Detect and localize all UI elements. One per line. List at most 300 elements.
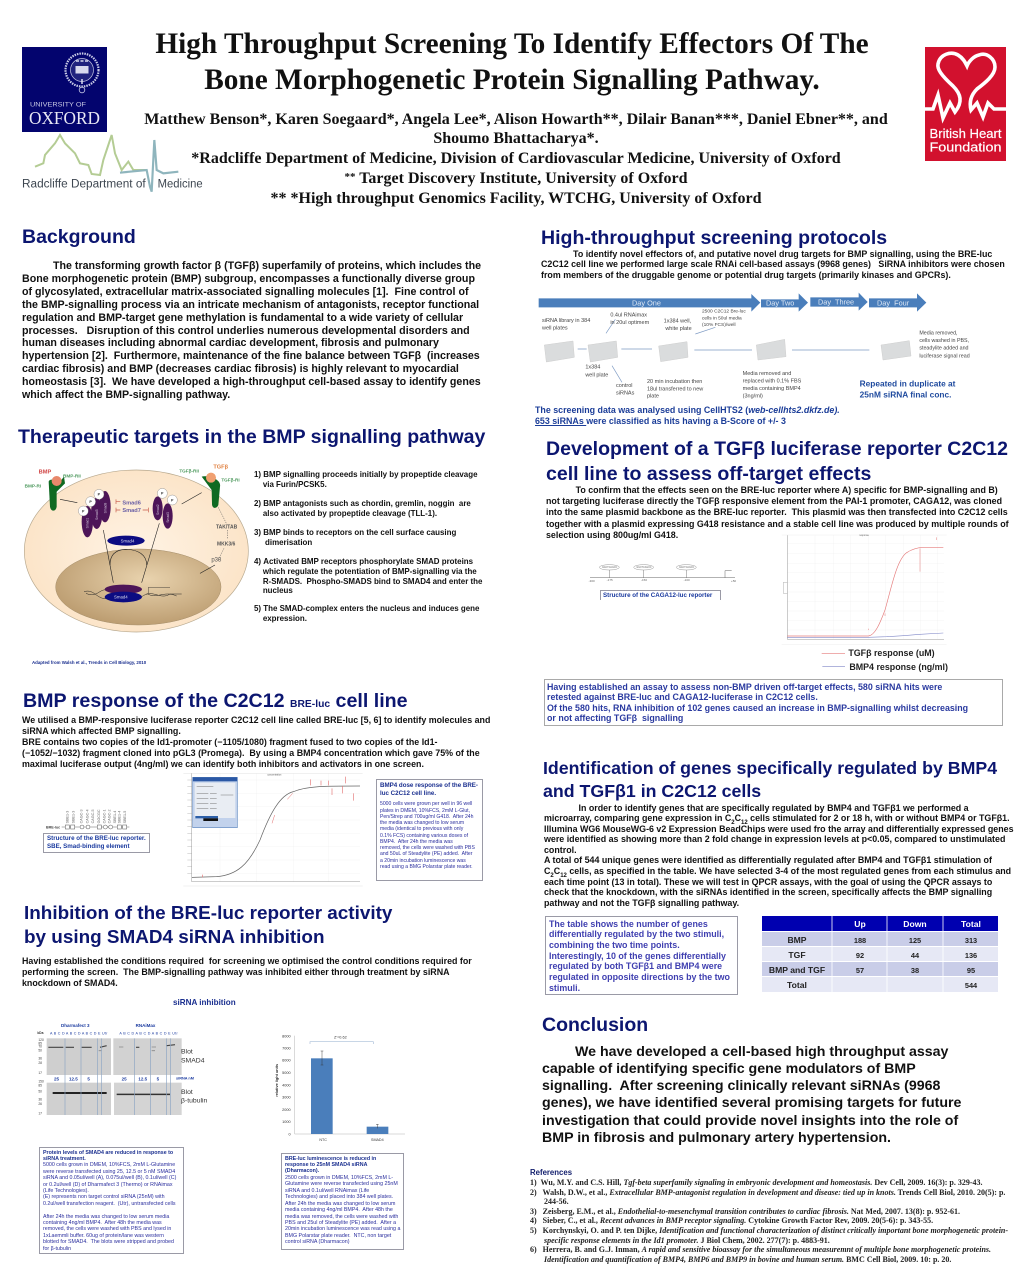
table: differentially regulated genes: TGF xyxy=(788,950,806,960)
labels: Media removed, xyxy=(919,331,958,337)
labels: plate xyxy=(647,394,659,400)
table: differentially regulated genes: Total xyxy=(961,919,981,929)
text: references: 2) Walsh, D.W., et al., Extracellular BMP-antagonist regulation in development and disease: tied up in knots. Trends Cell Biol, 2010. 20(5): p. xyxy=(530,1188,1005,1197)
caption box: protein levels: After 24h the media was changed to low serum media xyxy=(43,1214,169,1220)
diagram: CAGA12 reporter structure: GGCTCAGCC xyxy=(602,566,617,569)
callout: table explanation: combining the two time points. xyxy=(549,940,680,950)
figure: western blots: 5 xyxy=(157,1076,160,1081)
text: pathway steps: which regulate the potentiation of BMP-signalling via the xyxy=(263,567,477,576)
table: differentially regulated genes: Down xyxy=(903,919,927,929)
text: TGFb reporter xyxy=(546,485,1009,540)
figure: western blots: 12.5 xyxy=(69,1076,78,1081)
caption box: BMP4 dose response: 5000 cells were grown per well in 96 well xyxy=(380,801,472,807)
diagram: CAGA12 reporter structure: +50 xyxy=(731,579,736,583)
chart: relative light units bar chart: 6000 xyxy=(282,1059,291,1063)
caption box: CAGA12-luc: Structure of the CAGA12-luc reporter xyxy=(603,592,712,599)
table: differentially regulated genes: BMP xyxy=(787,935,807,945)
diagram: BRE-luc reporter structure: CAGC-5 xyxy=(91,810,95,823)
text: background: regulation and BMP-target gene methylation is fundamental to a wide variety of cellular xyxy=(22,312,463,324)
callout: table explanation: Interestingly, 10 of the genes differentially xyxy=(549,951,726,961)
table: differentially regulated genes xyxy=(762,916,998,992)
logo: University of Oxford: UNIVERSITY OF xyxy=(30,102,86,108)
chart: relative light units bar chart: 4000 xyxy=(282,1083,291,1087)
diagram: BMP signalling pathway: BMP xyxy=(39,469,51,475)
text: BMP response: We utilised a BMP-responsive luciferase reporter C2C12 cell line called BRE-luc [5, 6] to identify molecules and xyxy=(22,714,490,724)
diagram: BRE-luc reporter structure xyxy=(46,809,130,830)
caption box: BMP4 dose response: luc C2C12 cell line. xyxy=(380,790,436,797)
text: background xyxy=(22,260,481,401)
text: background: the BMP-signalling process via an intricate mechanism of antagonists, receptor functional xyxy=(22,299,479,311)
text: BMP response xyxy=(22,714,490,769)
labels: media containing BMP4 xyxy=(743,386,801,392)
table: differentially regulated genes: 136 xyxy=(965,951,977,960)
chart: relative light units bar chart: 2000 xyxy=(282,1108,291,1112)
text: background: cardiac fibrosis) and BMP (decreases cardiac fibrosis) is highly relevant to myocardial xyxy=(22,363,459,375)
callout: off-target effects: retested against BRE-luc and CAGA12-luciferase in C2C12 cells. xyxy=(547,692,818,702)
text: gene identification: In order to identify genes that are specifically regulated by BMP4 and TGFβ1 we performed a xyxy=(579,802,969,812)
chart: relative light units bar chart: NTC xyxy=(319,1138,327,1142)
caption box: BMP4 dose response: a 20min incubation luminescence was xyxy=(380,858,466,864)
diagram: BRE-luc reporter structure: SBE1-3 xyxy=(66,811,70,823)
chart: relative light units bar chart: SMAD4 xyxy=(371,1138,384,1142)
diagram: screening timeline xyxy=(538,292,970,400)
text: pathway steps: 1) BMP signalling proceeds initially by propeptide cleavage xyxy=(254,470,478,479)
text: references: specific response elements in the Id1 promoter. J Biol Chem, 2002. 277(7): p. 4883-91. xyxy=(544,1236,830,1245)
arrow: Day Two xyxy=(761,293,808,312)
heading: Inhibition of BRE-luc: by using SMAD4 siRNA inhibition xyxy=(24,927,324,948)
diagram: BRE-luc reporter structure: CAGC-4 xyxy=(86,810,90,823)
heading: Inhibition of BRE-luc: Inhibition of the BRE-luc reporter activity xyxy=(24,903,392,924)
labels xyxy=(541,309,970,400)
heading: Inhibition of BRE-luc xyxy=(24,903,392,948)
text: TGFb reporter: selection using 800ug/ml G418. xyxy=(546,530,678,540)
table: differentially regulated genes: 57 xyxy=(856,966,864,975)
diagram: CAGA12 reporter structure: -175 xyxy=(607,578,613,582)
labels: siRNAs xyxy=(616,391,635,397)
caption box: BRE-luc reporter: SBE, Smad-binding element xyxy=(47,843,130,850)
text: pathway steps: 2) BMP antagonists such as chordin, gremlin, noggin are xyxy=(254,499,471,508)
caption box: BMP4 dose response: and 50uL of Steadylite (PE) added. After xyxy=(380,851,472,857)
caption box: protein levels: 1xLaemmli buffer. 60ug of protein/lane was western xyxy=(43,1233,164,1239)
text: background: human diseases including abnormal cardiac development, fibrosis and pulmonary xyxy=(22,337,439,349)
text: references: 5) Korchynskyi, O. and P. ten Dijke, Identification and functional characterization of distinct critically important bone morphogenetic protein- xyxy=(530,1226,1008,1235)
arrow: Day Three: Day Three xyxy=(818,298,854,307)
table: differentially regulated genes: Total xyxy=(787,980,807,990)
caption box: protein levels: or 0.2ul/well (D) of Dharmafect 3 (Thermo) or RNAimax xyxy=(43,1182,173,1188)
callout: off-target effects: Of the 580 hits, RNA inhibition of 102 genes caused an increase in BMP-signalling whilst decreasing xyxy=(547,703,968,713)
text: gene identification xyxy=(544,802,1014,908)
chart: relative light units bar chart: 7000 xyxy=(282,1046,291,1050)
text: references: 4) Sieber, C., et al., Recent advances in BMP receptor signaling. Cytokine Growth Factor Rev, 2009. 20(5-6): p. 343-55. xyxy=(530,1216,933,1225)
callout: off-target effects xyxy=(544,679,1003,726)
diagram: BMP signalling pathway: P xyxy=(89,500,92,504)
text: gene identification: control. xyxy=(544,845,577,855)
title xyxy=(155,28,869,96)
caption box: luminescence: siRNA and 0.1ul/well RNAimax (Life xyxy=(285,1188,369,1194)
text: pathway steps: 5) The SMAD-complex enters the nucleus and induces gene xyxy=(254,604,479,613)
text: pathway steps: nucleus xyxy=(263,586,293,595)
labels: 2500 C2C12 Bre-luc xyxy=(702,309,746,315)
text: TGFb reporter: into the same plasmid backbone as the BRE-luc reporter. This plasmid was then transfected into C2C12 cells xyxy=(546,507,1008,517)
text: TGFb reporter: together with a plasmid expressing G418 resistance and a stable cell line was produced by multiple rounds of xyxy=(546,519,1009,529)
caption box: protein levels: containing 4ng/ml BMP4. After 48h the media was xyxy=(43,1220,162,1226)
authors and affiliations: Shoumo Bhattacharya*. xyxy=(433,130,599,147)
title: High Throughput Screening To Identify Effectors Of The xyxy=(155,28,869,60)
text: gene identification: A total of 544 unique genes were identified as differentially regulated after BMP4 and TGFβ1 stimulation of xyxy=(544,855,992,865)
logo: University of Oxford xyxy=(22,47,107,132)
figure: western blots: SMAD4 xyxy=(181,1057,205,1064)
diagram: BRE-luc reporter structure: SBE1-4 xyxy=(118,811,122,823)
figure: western blots: 5 xyxy=(87,1076,90,1081)
heading: Identification of genes: Identification of genes specifically regulated by BMP4 xyxy=(543,758,997,778)
table: differentially regulated genes: 38 xyxy=(911,966,919,975)
diagram: BMP signalling pathway: P xyxy=(171,498,174,502)
authors and affiliations: Matthew Benson*, Karen Soegaard*, Angela Lee*, Alison Howarth**, Dilair Banan***, Daniel Ebner**, and xyxy=(144,111,888,128)
diagram: BRE-luc reporter structure: SBE1-3 xyxy=(72,811,76,823)
caption box: luminescence: response to 25nM SMAD4 siRNA xyxy=(285,1162,367,1168)
labels: cells in 50ul media xyxy=(702,316,742,322)
chart: TGFb and BMP4 response curves xyxy=(782,534,946,644)
text: gene identification: pathway and not the TGFβ signalling pathway. xyxy=(544,898,739,908)
diagram: BMP signalling pathway: P xyxy=(82,509,85,513)
text: inhibition: knockdown of SMAD4. xyxy=(22,978,118,988)
text: pathway steps: 3) BMP binds to receptors on the cell surface causing xyxy=(254,528,456,537)
caption box: BRE-luc reporter xyxy=(43,833,150,853)
diagram: BRE-luc reporter structure: SBE1-4 xyxy=(113,811,117,823)
caption box: BMP4 dose response: read using a BMG Polarstar plate reader. xyxy=(380,864,473,870)
text: conclusion: investigation that could provide novel insights into the role of xyxy=(542,1113,958,1129)
text: pathway steps: expression. xyxy=(263,614,307,623)
table: differentially regulated genes: Up xyxy=(854,919,866,929)
table: differentially regulated genes: BMP and TGF xyxy=(769,965,825,975)
labels: well plates xyxy=(541,325,568,331)
chart: relative light units bar chart: Z'=0.62 xyxy=(334,1036,347,1040)
heading: Identification of genes xyxy=(543,758,998,801)
diagram: BMP signalling pathway: TGFβ-RII xyxy=(179,469,199,474)
diagram: BMP signalling pathway: Smad5 xyxy=(95,509,99,520)
labels: replaced with 0.1% FBS xyxy=(743,378,802,384)
authors and affiliations: ** Target Discovery Institute, University of Oxford xyxy=(345,170,687,187)
diagram: BRE-luc reporter structure: CAGC-3 xyxy=(80,810,84,823)
diagram: BRE-luc reporter structure: SBE1-5 xyxy=(123,811,127,823)
text: BMP response: siRNA which affected BMP signalling. xyxy=(22,726,181,736)
legend: response curves xyxy=(822,648,948,672)
heading: BMP response: BMP response of the C2C12 BRE-luc cell line xyxy=(23,690,408,712)
diagram: BMP signalling pathway: P xyxy=(98,493,101,497)
caption box: protein levels: 5000 cells grown in DMEM, 10%FCS, 2mM L-Glutamine xyxy=(43,1162,175,1168)
heading: Background: Background xyxy=(22,226,136,248)
caption box: luminescence: (Dharmacon). xyxy=(285,1168,319,1174)
text: background: of glycosylated, extracellular matrix-associated signalling molecules [1]. Fine control of xyxy=(22,286,469,298)
text: conclusion: BMP in fibrosis and pulmonary artery hypertension. xyxy=(542,1130,891,1146)
text: gene identification: C2C12 cells, as specified in the table. We have selected 3-4 of the most regulated genes from each stimulus and xyxy=(544,866,1011,879)
labels: (10% FCS)/well xyxy=(702,322,736,328)
diagram: BMP signalling pathway: BMP-RI xyxy=(25,484,41,489)
caption box: luminescence: After 24h the media was changed to low serum xyxy=(285,1201,395,1207)
caption box: protein levels: Protein levels of SMAD4 are reduced in response to xyxy=(43,1150,173,1156)
labels: luciferase signal read xyxy=(919,353,970,359)
text: background: hypertension [2]. Furthermore, maintenance of the fine balance between TGFβ (increases xyxy=(22,350,480,362)
heading: references: References xyxy=(530,1168,572,1177)
figure: western blots: 36 xyxy=(38,1097,42,1101)
caption box: luminescence: media was removed, the cells were washed with xyxy=(285,1214,398,1220)
text: inhibition xyxy=(22,956,472,988)
caption box: BMP4 dose response: plates in DMEM, 10%FCS, 2mM L-Glut, xyxy=(380,808,470,814)
text: pathway steps: R-SMADS. Phospho-SMADS bind to SMAD4 and enter the xyxy=(263,577,482,586)
text: conclusion: capable of identifying specific gene modulators of BMP xyxy=(542,1061,916,1077)
text: gene identification: were identified as showing more than 2 fold change in expression levels at p<0.05, compared to unstimulated xyxy=(544,834,1005,844)
callout: table explanation: differentially regulated by the two stimuli, xyxy=(549,929,724,939)
text: pathway steps: dimerisation xyxy=(265,538,312,547)
diagram: BMP signalling pathway: P xyxy=(161,492,164,496)
caption box: luminescence: PBS and 25ul of Steadylite (PE) added. After a xyxy=(285,1220,396,1226)
text: references: 1) Wu, M.Y. and C.S. Hill, Tgf-beta superfamily signaling in embryonic development and homeostasis. Dev Cell, 2009. 16(3): p. 329-43. xyxy=(530,1178,983,1187)
figure: western blots: 50 xyxy=(38,1089,42,1093)
text: protocols xyxy=(541,248,1005,280)
labels: (3ng/ml) xyxy=(743,393,763,399)
figure: western blots: 70 xyxy=(38,1045,42,1049)
callout: table explanation xyxy=(545,916,738,995)
figure: western blots: kDa xyxy=(37,1031,44,1035)
figure: western blots: Blot xyxy=(181,1089,193,1096)
heading: High-throughput screening protocols: High-throughput screening protocols xyxy=(541,227,887,249)
labels: 18ul transferred to new xyxy=(647,386,703,392)
arrow: Day Four xyxy=(869,293,926,312)
caption box: luminescence: 2500 cells grown in DMEM, 10%FCS, 2mM L- xyxy=(285,1175,393,1181)
arrows between plates xyxy=(578,319,869,382)
figure: western blots: 50 xyxy=(38,1048,42,1052)
label: siRNA inhibition: siRNA inhibition xyxy=(173,998,236,1007)
text: background: processes. Disruption of this control underlies numerous developmental disorders and xyxy=(22,325,470,337)
figure: western blots: 17 xyxy=(38,1112,42,1116)
figure: western blots: 26 xyxy=(38,1102,42,1106)
diagram: BMP signalling pathway: BMP-RII xyxy=(63,473,81,478)
text: gene identification: microarray, comparing gene expression in C2C12 cells stimulated for 2 or 18 h, with or without BMP4 or TGFβ1. xyxy=(544,813,1010,826)
diagram: BMP signalling pathway: Smad8 xyxy=(103,503,107,513)
diagram: BMP signalling pathway: TGFβ-RI xyxy=(221,478,240,483)
caption box: luminescence xyxy=(281,1153,404,1250)
text: inhibition: performing the screen. The BMP-signalling pathway was inhibited either through treatment by siRNA xyxy=(22,966,450,976)
diagram: CAGA12 reporter structure: GGCTCAGCC xyxy=(679,566,694,569)
text: background: The transforming growth factor β (TGFβ) superfamily of proteins, which includes the xyxy=(53,260,481,272)
text: conclusion: genes), we have identified several promising targets for future xyxy=(542,1095,961,1111)
legend: response curves: TGFβ response (uM) xyxy=(848,648,935,658)
table: differentially regulated genes: 125 xyxy=(909,936,921,945)
chart: BMP4 dose response: concentration xyxy=(267,773,282,776)
text: screening analysis xyxy=(535,405,840,426)
figure: western blots: 85 xyxy=(38,1042,42,1046)
figure: western blots: Dharmafect 3 xyxy=(61,1023,90,1028)
logo: British Heart Foundation: British Heart xyxy=(930,126,1002,141)
diagram: BMP signalling pathway: Smad7 xyxy=(122,508,141,514)
figure: western blots: 36 xyxy=(38,1057,42,1061)
logo: Radcliffe Department of Medicine: Medicine xyxy=(158,176,203,190)
labels: 0.4ul RNAimax xyxy=(610,313,647,319)
caption box: luminescence: control siRNA (Dharmacon) xyxy=(285,1239,349,1245)
caption box: BMP4 dose response: the media was changed to low serum xyxy=(380,820,464,826)
labels: siRNA library in 384 xyxy=(542,318,590,324)
caption box: luminescence: media containing 4ng/ml BMP4. After 48h the xyxy=(285,1207,393,1213)
chart: relative light units bar chart: 5000 xyxy=(282,1071,291,1075)
caption box: BMP4 dose response: 0.1% FCS) containing various doses of xyxy=(380,833,468,839)
table: differentially regulated genes: 544 xyxy=(965,981,978,990)
plates xyxy=(544,339,911,362)
text: pathway steps: also activated by propeptide cleavage (TLL-1). xyxy=(263,509,437,518)
figure: western blots: siRNA nM xyxy=(176,1077,194,1081)
text: pathway steps: via Furin/PCSK5. xyxy=(263,480,327,489)
table: differentially regulated genes: 92 xyxy=(856,951,864,960)
heading: Conclusion: Conclusion xyxy=(542,1014,648,1036)
callout: table explanation: stimuli. xyxy=(549,983,580,993)
caption box: protein levels xyxy=(39,1147,184,1254)
logo: University of Oxford: OXFORD xyxy=(29,108,100,128)
text: background: homeostasis [3]. We have developed a high-throughput cell-based assay to identify genes xyxy=(22,376,481,388)
arrow: Day Four: Day Four xyxy=(877,299,910,308)
callout: table explanation: regulated in opposite directions by the two xyxy=(549,972,730,982)
text: screening analysis: The screening data was analysed using CellHTS2 (web-cellhts2.dkfz.de). xyxy=(535,405,840,415)
caption box: protein levels: 0.2ul/well transfection reagent. (Utr), untransfected cells xyxy=(43,1201,175,1207)
logo: Radcliffe Department of Medicine: Radcliffe Department of xyxy=(22,176,146,190)
figure: western blots: 120 xyxy=(38,1038,44,1042)
caption box: BMP4 dose response: Pen/Strep and 700ug/ml G418. After 24h xyxy=(380,814,473,820)
labels: Media removed and xyxy=(743,371,791,377)
diagram: BMP signalling pathway: Smad1 xyxy=(86,518,90,528)
caption box: BMP4 dose response: removed, the cells were washed with PBS xyxy=(380,845,475,851)
figure: western blots: 25 xyxy=(122,1076,127,1081)
text: gene identification: check that the knockdown, with the siRNAs identified in the screen, specifically affects the BMP signalling xyxy=(544,887,992,897)
heading: TGFb reporter development xyxy=(546,438,1008,484)
arrow: Day Two: Day Two xyxy=(766,299,794,308)
diagram: BMP signalling pathway: TAK/TAB xyxy=(216,525,238,531)
diagram: screening timeline: 25nM siRNA final conc. xyxy=(860,389,951,399)
figure: western blots: 25 xyxy=(54,1076,60,1081)
chart: TGFb and BMP4 response curves: response xyxy=(859,534,870,537)
labels: 20 min incubation then xyxy=(647,379,702,385)
caption box: luminescence: 20min incubation luminescence was read using a xyxy=(285,1226,400,1232)
caption box: protein levels: removed, the cells were washed with PBS and lysed in xyxy=(43,1226,171,1232)
figure: western blots: A B C D A B C D A B C D E Utr xyxy=(50,1031,108,1035)
diagram: BRE-luc reporter structure: CAGC-2 xyxy=(108,810,112,823)
chart: relative light units bar chart: 3000 xyxy=(282,1096,291,1100)
caption box: protein levels: siRNA treatment. xyxy=(43,1156,86,1162)
text: pathway steps xyxy=(254,470,482,623)
labels: 1x384 well, xyxy=(664,319,692,325)
diagram: BMP signalling pathway: TGFβ xyxy=(213,465,229,471)
diagram: CAGA12 reporter structure: -150 xyxy=(641,578,647,582)
authors and affiliations: ** *High throughput Genomics Facility, WTCHG, University of Oxford xyxy=(270,190,761,207)
callout: table explanation: regulated by both TGFβ1 and BMP4 were xyxy=(549,961,722,971)
caption box: BMP4 dose response: BMP4. After 24h the media was xyxy=(380,839,453,845)
caption box: CAGA12-luc xyxy=(600,590,721,600)
caption box: protein levels: siRNA and 0.05ul/well (A), 0.075ul/well (B), 0.1ul/well (C) xyxy=(43,1175,176,1181)
diagram: BMP signalling pathway: Smad2 xyxy=(156,504,160,515)
diagram: BRE-luc reporter structure: BRE-luc xyxy=(46,825,60,829)
callout: off-target effects: Having established an assay to assess non-BMP driven off-target effects, 580 siRNA hits were xyxy=(547,682,942,692)
caption box: luminescence: Glutamine were reverse transfected using 25nM xyxy=(285,1181,398,1187)
labels: cells washed in PBS, xyxy=(919,338,969,344)
chart: relative light units bar chart: 1000 xyxy=(282,1120,291,1124)
authors and affiliations xyxy=(144,111,888,207)
diagram: BRE-luc reporter structure: CAGC-1 xyxy=(102,810,106,823)
arrow: Day One: Day One xyxy=(632,299,661,308)
caption box: protein levels: were reverse transfected using 25, 12.5 or 5 nM SMAD4 xyxy=(43,1169,175,1175)
text: gene identification: Illumina WG6 MouseWG-6 v2 Expression BeadChips were used fro the array and differentially expressed genes xyxy=(544,824,1014,834)
labels: steadylite added and xyxy=(919,346,969,352)
caption box: protein levels: (E) represents non target control siRNA (25nM) with xyxy=(43,1194,165,1200)
caption box: protein levels: blotted for SMAD4. The blots were stripped and probed xyxy=(43,1239,174,1245)
table: differentially regulated genes: 313 xyxy=(965,936,977,945)
text: TGFb reporter: not targeting luciferase directly the TGFβ responsive element from the PAI-1 promoter, CAGA12, was cloned xyxy=(546,496,1002,506)
callout: off-target effects: or not affecting TGFβ signalling xyxy=(547,713,683,723)
diagram: BMP signalling pathway: MKK3/6 xyxy=(217,541,236,547)
figure: western blots: 28 xyxy=(38,1061,42,1065)
arrow: Day Three xyxy=(810,293,868,311)
diagram: BMP signalling pathway: p38 xyxy=(211,557,222,563)
figure: western blots: 12.5 xyxy=(138,1076,148,1081)
logo: Radcliffe Department of Medicine xyxy=(22,133,203,192)
chart: relative light units bar chart: 0 xyxy=(289,1132,291,1136)
diagram: BMP signalling pathway: Smad4 xyxy=(121,538,135,543)
text: BMP response: (−1052/−1032) fragment cloned into pGL3 (Promega). By using a BMP4 concentration which gave 75% of the xyxy=(22,748,480,758)
text: TGFb reporter: To confirm that the effects seen on the BRE-luc reporter where A) specific for BMP-signalling and B) xyxy=(576,485,998,495)
text: pathway steps: 4) Activated BMP receptors phosphorylate SMAD proteins xyxy=(254,557,473,566)
caption box: BMP4 dose response xyxy=(376,779,483,881)
text: background: Bone morphogenetic protein (BMP) subgroup, encompasses a functionally diverse group xyxy=(22,273,475,285)
chart: BMP4 dose response xyxy=(184,773,362,886)
logo: British Heart Foundation xyxy=(925,47,1006,161)
caption box: luminescence: Technologies) and placed into 384 well plates. xyxy=(285,1194,393,1200)
text: protocols: C2C12 cell line we performed large scale RNAi cell-based assays (9968 genes) SiRNA inhibitors were chosen xyxy=(541,259,1005,269)
table: differentially regulated genes: 188 xyxy=(854,936,866,945)
heading: Identification of genes: and TGFβ1 in C2C12 cells xyxy=(543,781,761,801)
labels: control xyxy=(616,383,633,389)
diagram: BMP signalling pathway: Smad6 xyxy=(122,500,141,506)
diagram: BMP signalling pathway xyxy=(24,464,249,632)
legend: response curves: BMP4 response (ng/ml) xyxy=(849,662,948,672)
caption box: luminescence: BMG Polarstar plate reader. NTC, non target xyxy=(285,1233,391,1239)
text: BMP response: BRE contains two copies of the Id1-promoter (−1105/1080) fragment fused to two copies of the Id1- xyxy=(22,736,437,746)
text: conclusion: signalling. After screening clinically relevant siRNAs (9968 xyxy=(542,1078,940,1094)
logo: British Heart Foundation: Foundation xyxy=(930,140,1002,154)
chart: relative light units bar chart xyxy=(275,1034,405,1142)
text: inhibition: Having established the conditions required for screening we optimised the control conditions required for xyxy=(22,956,472,966)
diagram: CAGA12 reporter structure: -100 xyxy=(684,578,690,582)
diagram: CAGA12 reporter structure: -300 xyxy=(589,579,595,583)
heading: Therapeutic targets: Therapeutic targets in the BMP signalling pathway xyxy=(18,426,485,448)
caption box: BMP4 dose response: media (identical to previous with only xyxy=(380,826,463,832)
figure: western blots xyxy=(37,1023,208,1116)
diagram: screening timeline: Repeated in duplicate at xyxy=(860,379,956,389)
chart: relative light units bar chart: relative light units xyxy=(275,1064,279,1097)
diagram: BRE-luc reporter structure: GGCGC xyxy=(97,809,101,823)
text: protocols: To identify novel effectors of, and putative novel drug targets for BMP signalling, using the BRE-luc xyxy=(573,248,992,258)
text: protocols: from members of the druggable genome or potential drug targets (primarily kinases and GPCRs). xyxy=(541,270,951,280)
text: references: 3) Zeisberg, E.M., et al., Endothelial-to-mesenchymal transition contributes to cardiac fibrosis. Nat Med, 2007. 13(8): p. 952-61. xyxy=(530,1207,960,1216)
diagram: BMP signalling pathway: Smad4 xyxy=(114,594,128,599)
labels: well plate xyxy=(584,372,608,378)
arrow: Day One xyxy=(539,294,760,312)
figure: western blots: RNAiMax xyxy=(136,1023,156,1028)
title: Bone Morphogenetic Protein Signalling Pathway. xyxy=(204,64,820,96)
text: BMP response: maximal luciferase output (4ng/ml) we can identify both inhibitors and activators in one screen. xyxy=(22,758,424,768)
caption box: BRE-luc reporter: Structure of the BRE-luc reporter. xyxy=(47,835,146,842)
diagram: CAGA12 reporter structure xyxy=(588,564,736,583)
labels: in 20ul optimem xyxy=(610,320,650,326)
labels: 1x384 xyxy=(585,364,600,370)
figure: western blots: Blot xyxy=(181,1049,193,1056)
caption: diagram source: Adapted from Walsh et al., Trends in Cell Biology, 2010 xyxy=(32,660,146,665)
figure: western blots: β-tubulin xyxy=(181,1098,208,1105)
